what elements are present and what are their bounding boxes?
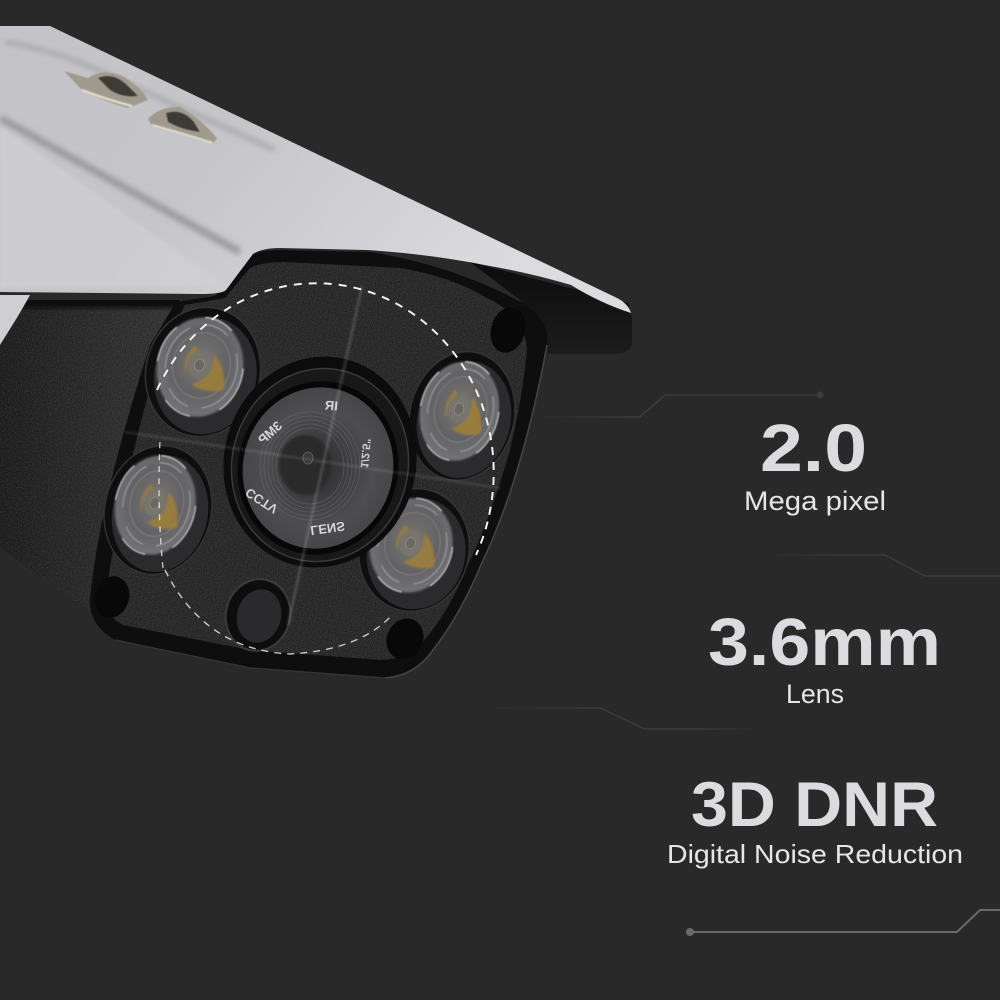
connector line 1 <box>545 392 824 417</box>
dashed circle <box>157 283 494 654</box>
caption: Mega pixel: Mega pixel <box>744 486 886 516</box>
value: 2.0: 2.0 <box>760 411 867 486</box>
caption: Digital Noise Reduction: Digital Noise Reduction <box>667 839 963 869</box>
lens marking: LENS: LENS <box>309 519 346 538</box>
mounting screw 1 <box>64 71 148 108</box>
value: 3.6mm: 3.6mm <box>708 605 941 680</box>
connector line 3 <box>470 708 760 729</box>
lens marking: CCTV: CCTV <box>243 485 281 517</box>
lens marking: IR: IR <box>324 397 339 414</box>
PIR sensor <box>218 572 298 658</box>
lens marking: 3MP: 3MP <box>255 418 285 447</box>
screw hole bottom left <box>90 572 134 622</box>
spec: 3D DNR <box>667 770 963 869</box>
LED bottom left <box>91 434 225 586</box>
lens flare cross <box>125 286 500 625</box>
sun hood underside <box>470 262 632 354</box>
camera illustration <box>0 26 632 678</box>
camera body <box>0 292 190 620</box>
mounting screw 2 <box>148 107 217 144</box>
LED top left <box>132 295 274 449</box>
sun hood <box>0 26 631 313</box>
front plate <box>106 262 527 660</box>
spec: lens <box>708 605 941 709</box>
connector line 2 <box>760 555 1000 576</box>
LED bottom right <box>346 477 482 623</box>
screw hole top right <box>486 303 530 357</box>
connector line 4 <box>686 910 1000 936</box>
screw hole bottom right <box>380 612 430 666</box>
value: 3D DNR: 3D DNR <box>691 770 938 840</box>
spec: megapixel <box>744 411 886 516</box>
main lens <box>201 336 439 588</box>
lens marking: 1/2.5: 1/2.5" <box>358 438 372 469</box>
caption: Lens: Lens <box>786 679 844 709</box>
LED top right <box>396 340 528 492</box>
camera front face <box>90 250 548 678</box>
